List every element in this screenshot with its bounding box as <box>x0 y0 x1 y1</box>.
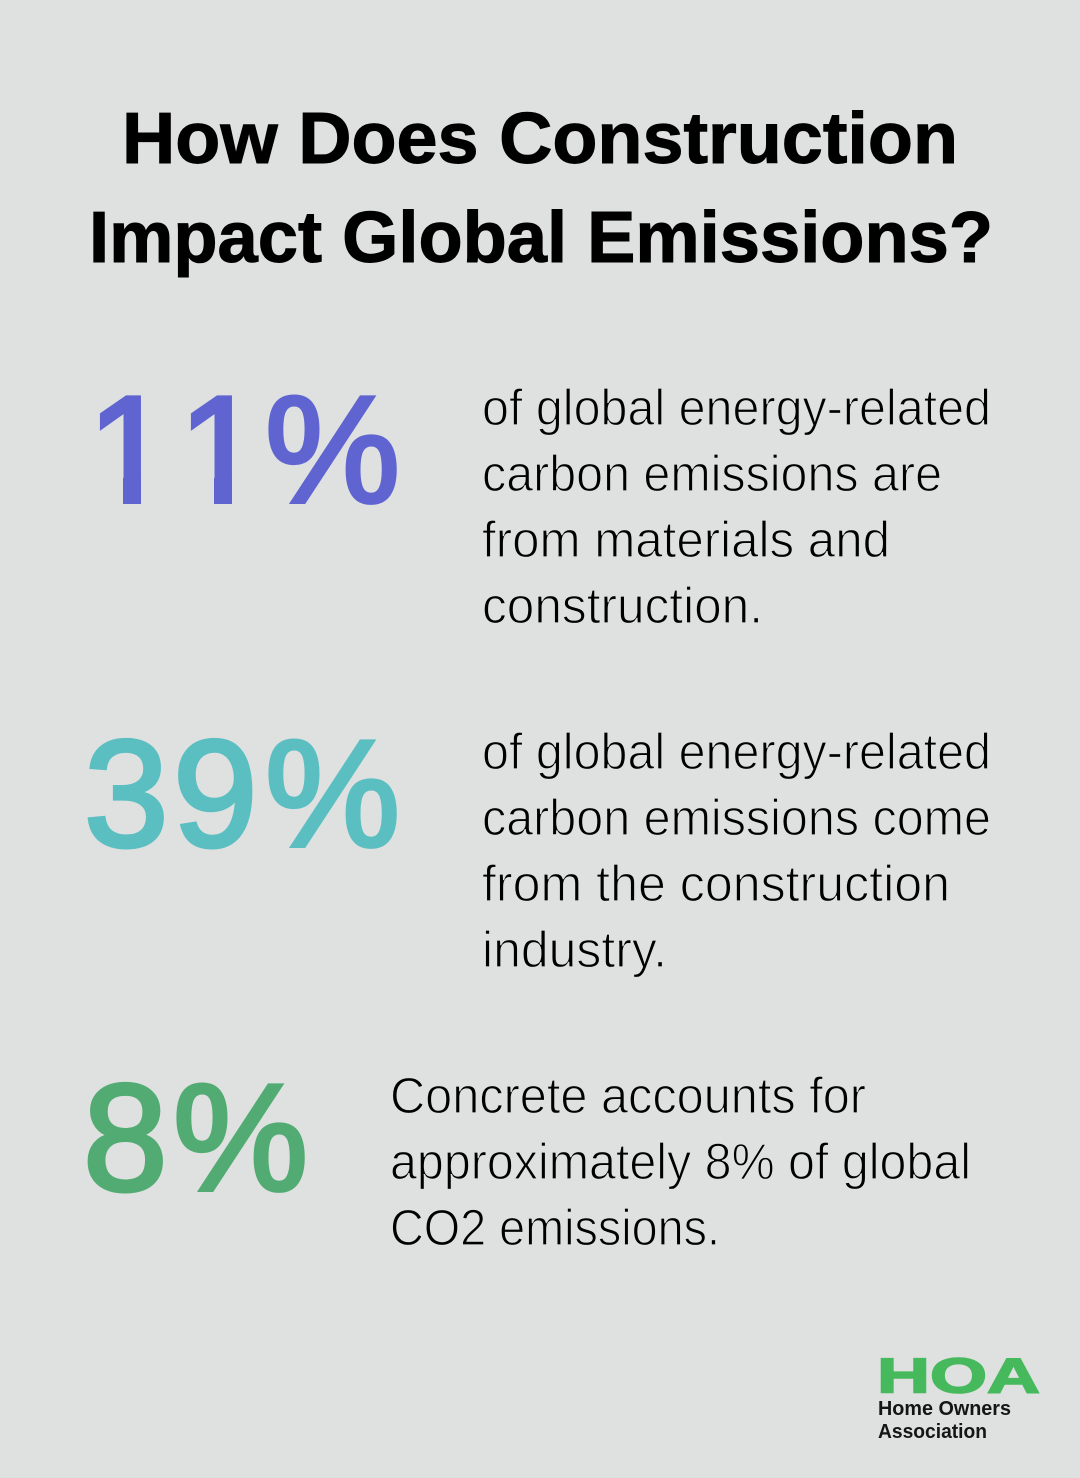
description: materials and construction: carbon emissions are <box>482 445 942 502</box>
logo wordmark: Home Owners <box>878 1398 1011 1420</box>
description: materials and construction: construction. <box>482 577 763 634</box>
title <box>89 99 993 278</box>
stat number: 8%: 8% <box>83 1053 308 1223</box>
logo wordmark: Association <box>878 1421 987 1443</box>
stat number: 39%: 39% <box>84 709 400 879</box>
description: construction industry: from the construction <box>482 855 950 912</box>
logo mark: HOA: HOA <box>877 1350 1040 1404</box>
description: concrete: Concrete accounts for <box>390 1067 866 1124</box>
title: Impact Global Emissions? <box>89 198 993 278</box>
stat number: 11%: % <box>265 365 400 535</box>
description: materials and construction <box>482 379 991 634</box>
stat number: 11%: 11% <box>87 365 400 535</box>
description: concrete <box>390 1067 971 1256</box>
description: materials and construction: from materials and <box>482 511 890 568</box>
panel: 39% statistic <box>84 709 991 978</box>
description: construction industry: of global energy-related <box>482 723 991 780</box>
description: construction industry <box>482 723 991 978</box>
panel: 8% statistic <box>83 1053 971 1256</box>
logo: Home Owners Association <box>877 1350 1040 1443</box>
description: construction industry: industry. <box>482 921 667 978</box>
description: concrete: approximately 8% of global <box>390 1133 971 1190</box>
logo wordmark <box>878 1398 1011 1443</box>
panel: 11% statistic <box>100 388 988 623</box>
description: concrete: CO2 emissions. <box>390 1199 720 1256</box>
title: How Does Construction <box>122 99 958 179</box>
description: construction industry: carbon emissions come <box>482 789 991 846</box>
description: materials and construction: of global energy-related <box>482 379 991 436</box>
stat number: 11% <box>100 394 397 505</box>
